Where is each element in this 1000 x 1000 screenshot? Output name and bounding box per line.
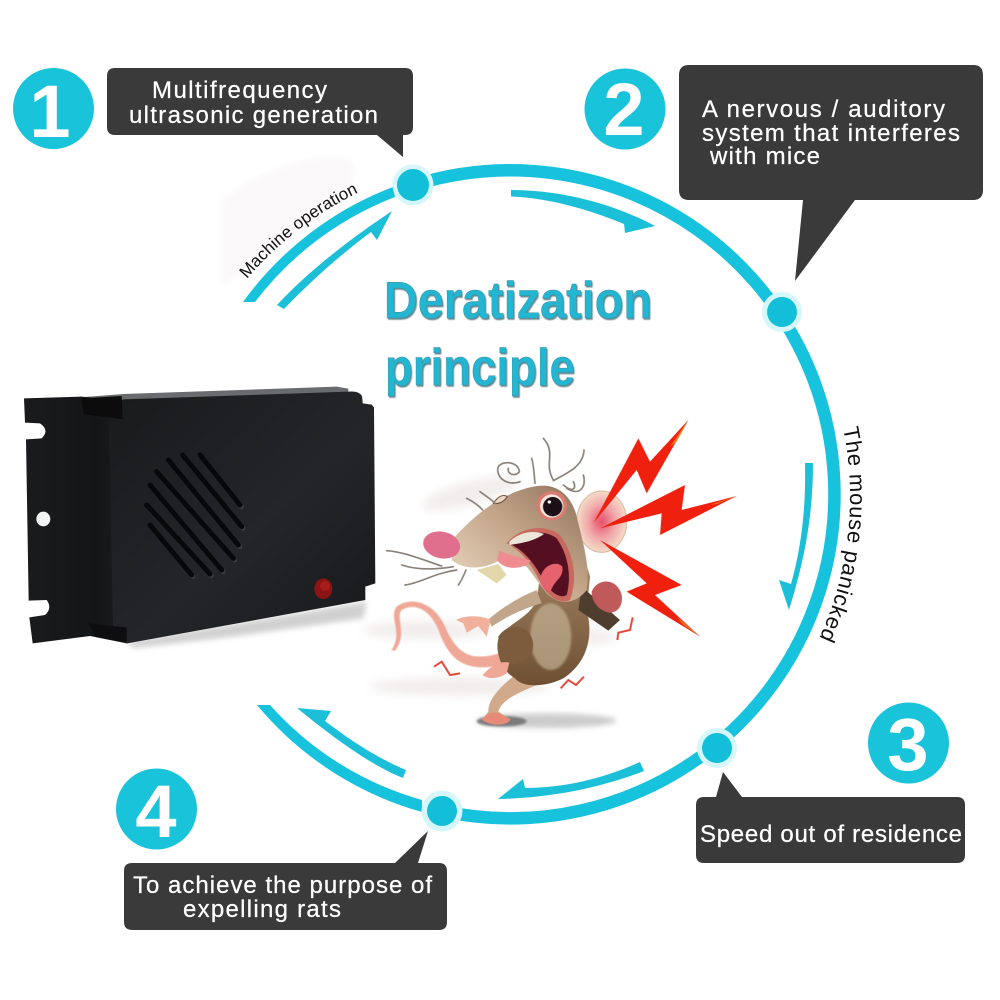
badge 2 bbox=[584, 68, 666, 151]
main arc: steps 1 to 4 bbox=[414, 170, 834, 818]
badge 1 bbox=[13, 68, 94, 153]
illustration: panicked rat bbox=[363, 420, 737, 728]
belly bbox=[530, 603, 571, 670]
badge 4: 4 bbox=[135, 770, 177, 853]
fist bbox=[592, 581, 622, 613]
callout 1: ultrasonic generation bbox=[129, 102, 378, 129]
faint patch behind machine label bbox=[222, 157, 354, 285]
eye bbox=[536, 491, 567, 520]
bolt tips bbox=[670, 420, 737, 637]
label: machine operation: Machine operation bbox=[239, 186, 358, 278]
device front face bbox=[108, 392, 375, 643]
device speaker grille bbox=[147, 455, 242, 575]
badge 4 bbox=[116, 768, 197, 853]
title: principle bbox=[385, 339, 575, 397]
badge 3: 3 bbox=[887, 703, 929, 786]
closed eye bbox=[493, 496, 507, 504]
ground shadow bbox=[477, 713, 617, 728]
badge 3 bbox=[868, 702, 949, 786]
arm left bbox=[488, 590, 542, 627]
ear bbox=[577, 491, 627, 552]
arrow: step 4 to output bbox=[297, 708, 406, 778]
callout 2: A nervous / auditory bbox=[702, 96, 945, 123]
callout 1: Multifrequency bbox=[152, 77, 327, 104]
arrow: step 1 to 2 bbox=[511, 190, 655, 233]
callout 4: To achieve the purpose of bbox=[133, 872, 432, 899]
callout 4 bbox=[124, 831, 447, 930]
device LED bbox=[314, 578, 332, 599]
device top highlight bbox=[80, 387, 348, 401]
node 4 bbox=[422, 790, 462, 832]
title bbox=[384, 272, 652, 397]
callout 3: Speed out of residence bbox=[700, 821, 962, 848]
device flange bbox=[24, 397, 127, 643]
lightning bolts bbox=[593, 420, 737, 637]
front foot bbox=[483, 662, 509, 678]
outer arc: machine operation bbox=[243, 187, 395, 302]
node 1 bbox=[392, 164, 434, 206]
whiskers and hair bbox=[387, 438, 584, 585]
badge 2: 2 bbox=[603, 68, 645, 151]
device mounting hole bbox=[36, 512, 50, 526]
mouth lip bbox=[507, 528, 574, 601]
tongue bbox=[540, 564, 563, 592]
head bbox=[452, 486, 588, 602]
device lower tab bbox=[88, 623, 127, 643]
foot shadow bbox=[477, 716, 527, 727]
callout 4: expelling rats bbox=[183, 896, 341, 923]
nose bbox=[421, 528, 463, 562]
hand bbox=[456, 616, 491, 637]
arrow: step 2 to 3 bbox=[779, 463, 813, 610]
callout 2: system that interferes bbox=[702, 120, 960, 147]
node 3 bbox=[697, 728, 737, 768]
arrow: step 3 to 4 bbox=[498, 762, 644, 799]
back leg bbox=[482, 673, 537, 724]
neck and body bbox=[497, 543, 590, 685]
device: ultrasonic repeller bbox=[24, 387, 375, 648]
device speaker grille highlights bbox=[148, 457, 243, 577]
callout 2: with mice bbox=[709, 143, 820, 170]
shock zigzags bbox=[434, 617, 633, 688]
motion blur bbox=[363, 469, 617, 696]
callout 3 bbox=[696, 772, 965, 863]
title: Deratization bbox=[384, 272, 652, 330]
arrow: machine to step 1 bbox=[277, 211, 392, 309]
badge 1: 1 bbox=[29, 70, 71, 153]
callout 2 bbox=[679, 65, 983, 281]
lower lip bbox=[497, 550, 531, 568]
foot bbox=[482, 713, 511, 724]
buck teeth bbox=[477, 564, 507, 583]
callout 1 bbox=[107, 68, 413, 157]
device upper slot bbox=[82, 396, 123, 419]
device shadow bbox=[127, 602, 367, 648]
teeth bbox=[509, 532, 544, 545]
outer arc tail bbox=[257, 705, 422, 812]
arm right bbox=[578, 587, 620, 631]
tail bbox=[392, 602, 502, 667]
node 2 bbox=[762, 292, 802, 332]
thigh bbox=[498, 627, 533, 664]
label: the mouse panicked: The mouse panicked bbox=[820, 426, 862, 644]
mouth bbox=[510, 532, 569, 596]
circular process ring bbox=[243, 170, 834, 818]
